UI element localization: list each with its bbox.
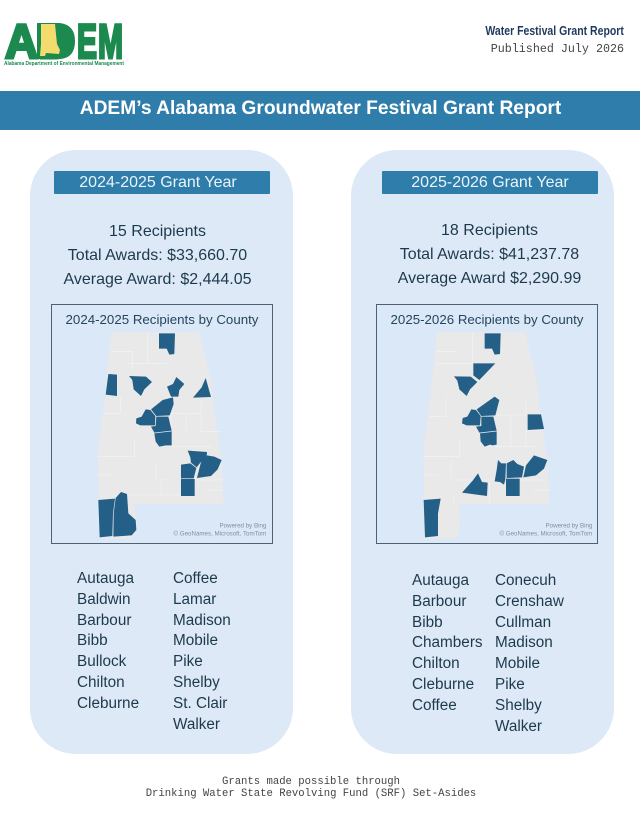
county list column one <box>77 570 139 712</box>
grant year heading <box>382 171 598 194</box>
summary stats: 15 Recipients <box>109 223 206 240</box>
county list column two: Pike <box>495 676 525 693</box>
grant year heading: 2024-2025 Grant Year <box>79 174 237 191</box>
title banner: ADEM’s Alabama Groundwater Festival Grant Report <box>80 98 561 119</box>
footer note <box>146 776 476 800</box>
grant year heading <box>54 171 270 194</box>
county list column two: Shelby <box>495 697 542 714</box>
footer note: Grants made possible through <box>222 776 400 788</box>
report title: Water Festival Grant Report <box>486 24 624 38</box>
county map: © GeoNames, Microsoft, TomTom <box>500 530 592 537</box>
county list column two <box>173 570 231 733</box>
county list column one: Coffee <box>412 697 457 714</box>
county list column two: Cullman <box>495 614 551 631</box>
county list column one: Cleburne <box>77 695 139 712</box>
county list column one: Chambers <box>412 634 483 651</box>
county list column two: Coffee <box>173 570 218 587</box>
county list column one: Cleburne <box>412 676 474 693</box>
panel: 2025-2026 <box>351 150 614 754</box>
summary stats <box>398 222 581 287</box>
title banner <box>0 91 640 130</box>
county list column two: Lamar <box>173 591 216 608</box>
county list column two: Conecuh <box>495 572 556 589</box>
county map: Powered by Bing <box>220 522 267 529</box>
county list column two: Walker <box>495 718 542 735</box>
county list column one: Barbour <box>77 612 131 629</box>
summary stats: 18 Recipients <box>441 222 538 239</box>
county list column two: Madison <box>173 612 231 629</box>
county list column one: Barbour <box>412 593 466 610</box>
county list column two: Pike <box>173 653 203 670</box>
summary stats: Average Award: $2,444.05 <box>64 271 252 288</box>
county map: 2025-2026 Recipients by County <box>391 312 583 327</box>
panel: 2024-2025 <box>30 150 293 754</box>
county list column one <box>412 572 483 714</box>
county list column one: Chilton <box>77 674 125 691</box>
county list column one: Bibb <box>412 614 443 631</box>
county list column one: Autauga <box>77 570 134 587</box>
county map: Powered by Bing <box>546 522 593 529</box>
publish date: Published July 2026 <box>491 42 624 56</box>
county list column two: Shelby <box>173 674 220 691</box>
logo: ADEM <box>4 18 124 69</box>
county map: © GeoNames, Microsoft, TomTom <box>174 530 266 537</box>
summary stats <box>64 223 252 288</box>
county map: 2024-2025 Recipients by County <box>66 312 258 327</box>
county list column two: Walker <box>173 716 220 733</box>
summary stats: Total Awards: $41,237.78 <box>400 246 579 263</box>
county list column one: Bullock <box>77 653 126 670</box>
grant year heading: 2025-2026 Grant Year <box>411 174 569 191</box>
county list column one: Bibb <box>77 632 108 649</box>
county map <box>376 304 598 544</box>
county list column two: Crenshaw <box>495 593 564 610</box>
county list column two <box>495 572 564 735</box>
county list column one: Chilton <box>412 655 460 672</box>
summary stats: Total Awards: $33,660.70 <box>68 247 247 264</box>
county list column two: Mobile <box>173 632 218 649</box>
summary stats: Average Award $2,290.99 <box>398 270 581 287</box>
footer note: Drinking Water State Revolving Fund (SRF) Set-Asides <box>146 788 476 800</box>
county list column two: Mobile <box>495 655 540 672</box>
county map <box>51 304 273 544</box>
county list column two: Madison <box>495 634 553 651</box>
county list column one: Baldwin <box>77 591 131 608</box>
county list column two: St. Clair <box>173 695 227 712</box>
county list column one: Autauga <box>412 572 469 589</box>
